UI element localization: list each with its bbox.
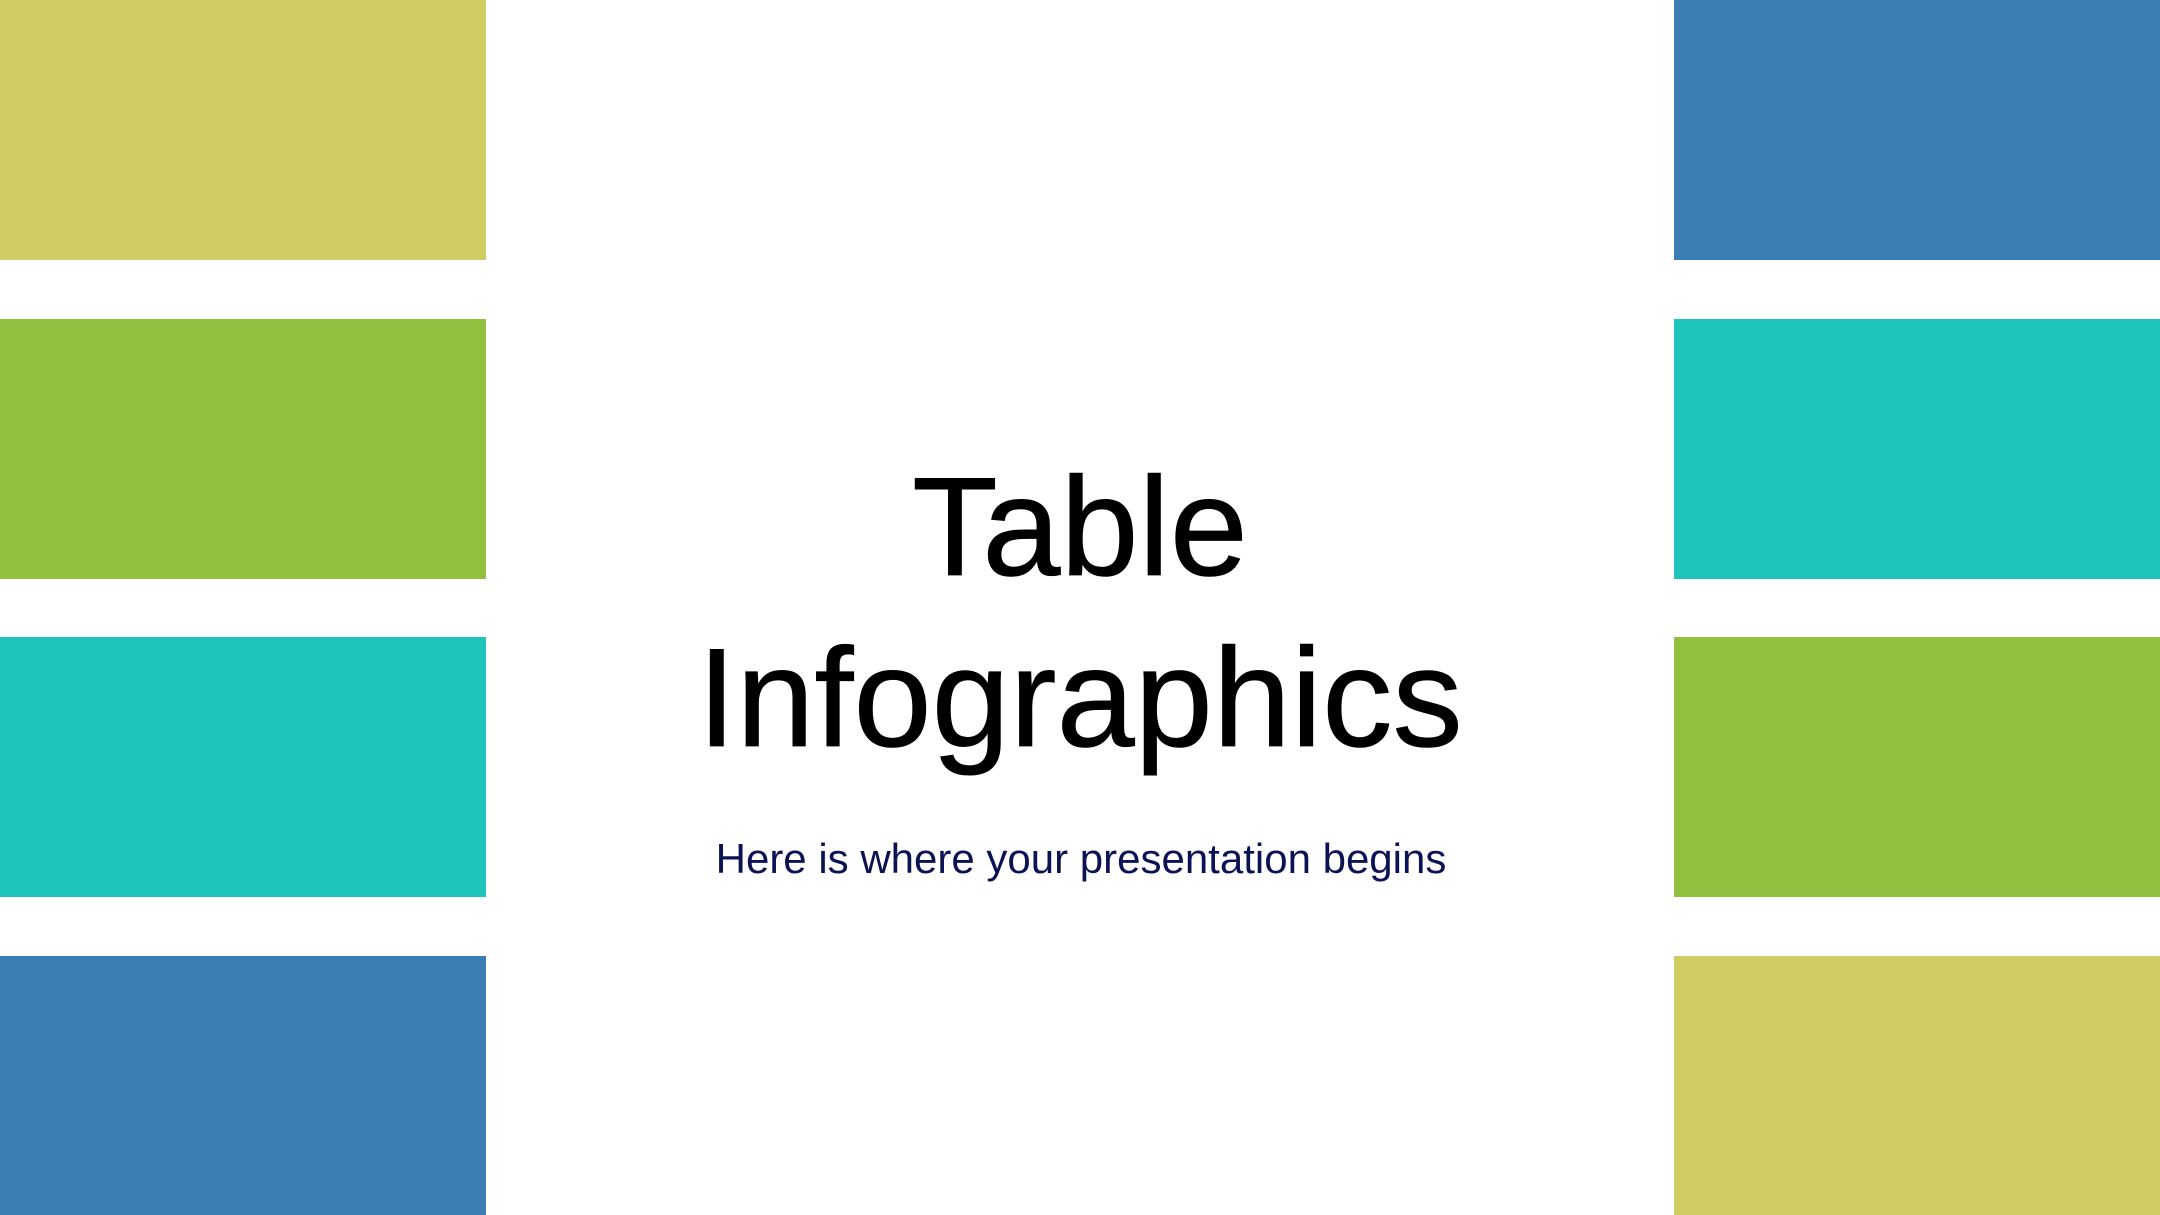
title (697, 448, 1463, 776)
panel: right teal block (1674, 319, 2160, 579)
title: Infographics (697, 619, 1463, 776)
panel: right blue block (1674, 0, 2160, 260)
panel: left green block (0, 319, 486, 579)
panel: left yellow block (0, 0, 486, 260)
subtitle: Here is where your presentation begins (716, 835, 1446, 882)
panel: right yellow block (1674, 956, 2160, 1215)
panel: left teal block (0, 637, 486, 897)
title: Table (912, 448, 1248, 605)
panel: left blue block (0, 956, 486, 1215)
panel: right green block (1674, 637, 2160, 897)
